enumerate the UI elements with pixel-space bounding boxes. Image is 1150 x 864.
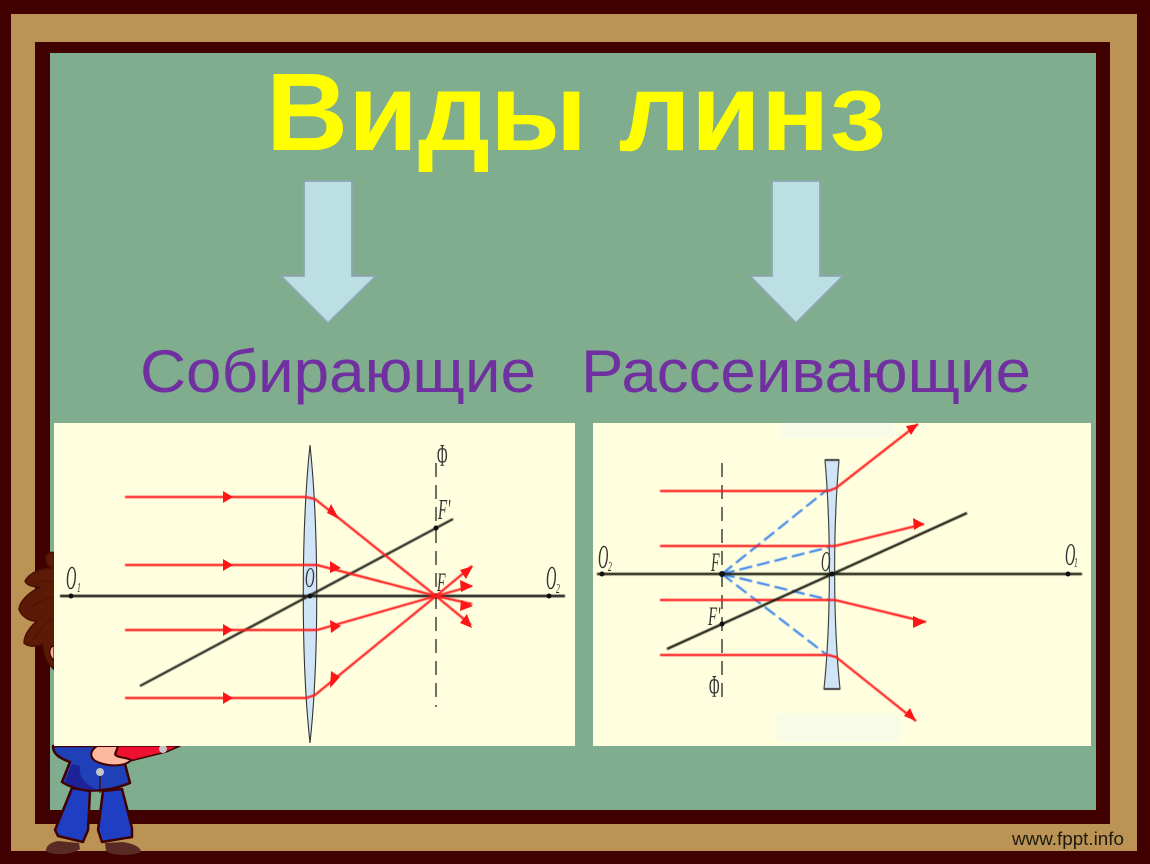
hand xyxy=(91,746,131,765)
labels: O xyxy=(1065,538,1075,573)
right trouser leg xyxy=(98,789,132,842)
lens xyxy=(303,445,317,743)
labels: F' xyxy=(437,494,451,525)
faded patches xyxy=(775,423,901,742)
labels: 2 xyxy=(556,582,560,597)
labels: O xyxy=(305,561,315,593)
labels: Φ xyxy=(709,670,720,705)
red rays xyxy=(660,424,926,721)
labels: O xyxy=(821,545,831,577)
title: Виды линз xyxy=(266,51,886,174)
heading: converging lenses: Собирающие xyxy=(140,338,536,405)
ray arrowheads xyxy=(904,424,926,721)
jacket shading xyxy=(65,764,98,790)
labels: O xyxy=(66,559,76,597)
heading: diverging lenses: Рассеивающие xyxy=(581,338,1031,405)
labels: 2 xyxy=(608,560,612,575)
ear xyxy=(50,646,54,660)
labels: 1 xyxy=(77,581,81,596)
labels: 1 xyxy=(1074,556,1078,571)
lens caps xyxy=(824,460,840,689)
axes xyxy=(597,513,1082,649)
buttons xyxy=(96,768,104,776)
dashed focal plane xyxy=(435,463,437,707)
labels xyxy=(598,538,1078,705)
dashed focal plane xyxy=(721,463,723,698)
principal axis xyxy=(60,519,565,686)
blue dashed construction lines xyxy=(722,489,830,655)
panel: diverging lens diagram xyxy=(593,423,1091,746)
labels: F xyxy=(436,567,446,597)
panel: converging lens diagram xyxy=(54,423,575,746)
axis points xyxy=(600,571,1070,626)
jacket seam xyxy=(99,776,101,793)
labels: O xyxy=(598,538,608,576)
left trouser leg xyxy=(55,788,90,842)
labels: F' xyxy=(707,602,721,631)
labels: O xyxy=(546,559,556,597)
axis points xyxy=(68,526,552,599)
jacket xyxy=(53,746,135,790)
arrow: left down xyxy=(281,181,376,323)
ray arrowheads xyxy=(223,491,473,704)
book xyxy=(115,746,180,761)
cartoon boy figure xyxy=(19,552,180,855)
red rays xyxy=(125,497,472,698)
footer url: www.fppt.info xyxy=(1011,829,1124,849)
hair xyxy=(19,552,56,671)
arrow: right down xyxy=(750,181,843,323)
labels: F xyxy=(710,547,720,577)
labels: Φ xyxy=(437,439,448,474)
shoes xyxy=(46,841,80,854)
labels xyxy=(66,439,560,597)
lens xyxy=(824,460,840,689)
